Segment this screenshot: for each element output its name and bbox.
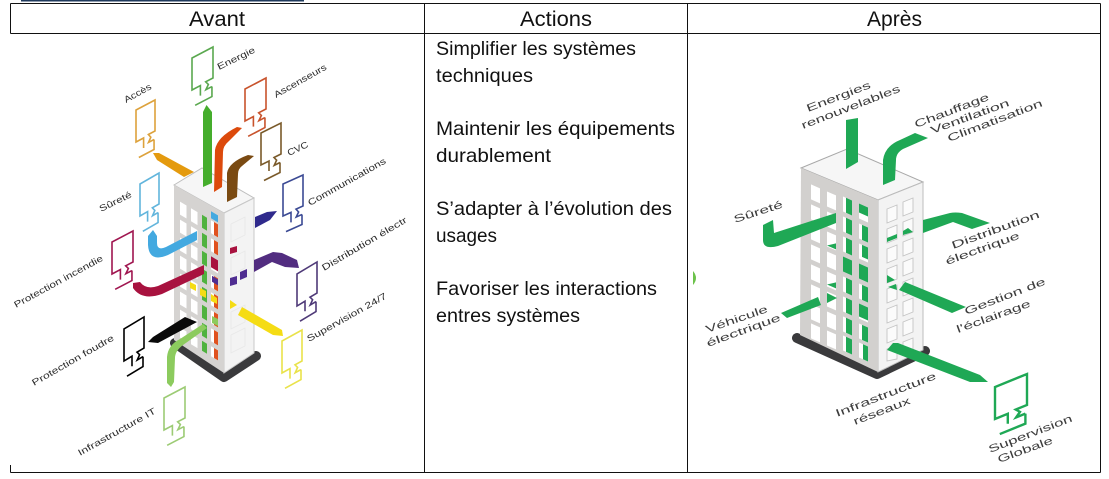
label: Chauffage Ventilation Climatisation <box>913 91 1045 145</box>
label: Distribution électrique: Distribution électr <box>320 215 409 273</box>
action: s'adapter: S’adapter à l’évolution des <box>436 198 672 220</box>
building before <box>174 168 256 377</box>
arrow: distribution <box>254 252 299 272</box>
heading: Avant: Avant <box>189 8 245 31</box>
label: Gestion de l'éclairage: l'éclairage <box>955 298 1033 336</box>
green half-circle mark <box>693 271 696 285</box>
icon: accès <box>136 100 155 159</box>
arrow: protection incendie <box>133 265 204 296</box>
label: Gestion de l'éclairage <box>955 276 1048 336</box>
label: Distribution électrique: Distribution <box>950 209 1042 252</box>
arrow: énergie <box>203 105 212 187</box>
arrow: accès <box>153 153 194 177</box>
icon: communications <box>283 175 303 233</box>
label: Infrastructure IT: Infrastructure IT <box>76 405 158 458</box>
label: Supervision Globale: Supervision <box>987 413 1074 456</box>
building after <box>797 149 925 374</box>
action: simplifier: Simplifier les systèmes <box>436 38 636 60</box>
action: maintenir: Maintenir les équipements <box>436 118 675 140</box>
arrow: infrastructure réseaux <box>887 343 988 382</box>
panel: après diagram <box>693 79 1074 466</box>
label: Energies renouvelables: renouvelables <box>800 83 902 132</box>
label: Sûreté: Sûreté <box>97 189 133 214</box>
label: Distribution électrique: électrique <box>944 230 1022 268</box>
icon: supervision globale <box>995 374 1027 436</box>
label: Ascenseurs: Ascenseurs <box>272 62 329 100</box>
label: Gestion de l'éclairage: Gestion de <box>963 276 1048 318</box>
action: s'adapter: usages <box>436 225 497 247</box>
panel: avant diagram <box>12 45 409 458</box>
action: favoriser <box>436 278 657 327</box>
label: Infrastructure réseaux: Infrastructure <box>834 370 938 420</box>
arrow: véhicule électrique <box>781 293 837 318</box>
label: Energies renouvelables <box>800 79 902 132</box>
label: Véhicule électrique: Véhicule <box>704 303 770 336</box>
panel: actions text <box>436 38 675 327</box>
label: Supervision Globale <box>987 413 1074 466</box>
icon: protection incendie <box>112 231 133 291</box>
label: Protection foudre: Protection foudre <box>30 333 116 388</box>
arrow: énergies renouvelables <box>846 118 858 169</box>
label: Infrastructure réseaux: réseaux <box>852 395 913 428</box>
label: Chauffage Ventilation Climatisation: Ventilation <box>929 97 1011 137</box>
action: simplifier: techniques <box>436 65 533 87</box>
arrow: distribution électrique <box>923 212 990 233</box>
label: Chauffage Ventilation Climatisation: Climatisation <box>946 97 1045 145</box>
label: Chauffage Ventilation Climatisation: Chauffage <box>913 91 991 131</box>
arrow: chauffage ventilation climatisation <box>883 133 928 185</box>
icon: protection foudre <box>124 317 144 378</box>
icon: infrastructure IT <box>164 387 185 447</box>
arrow: communications <box>255 211 277 228</box>
heading: Actions: Actions <box>520 8 592 31</box>
label: Energies renouvelables: Energies <box>805 79 873 115</box>
arrow: sûreté <box>763 213 836 247</box>
icon: supervision <box>282 330 302 390</box>
arrow: sûreté <box>148 230 197 257</box>
action: simplifier <box>436 38 636 87</box>
label: Supervision 24/7: Supervision 24/7 <box>305 291 388 344</box>
icon: distribution <box>297 262 317 323</box>
label: Accès: Accès <box>122 81 154 105</box>
label: Protection incendie: Protection incendie <box>12 253 105 310</box>
icon: sûreté <box>140 173 159 233</box>
arrow: gestion de l'éclairage <box>899 282 966 313</box>
action: favoriser: Favoriser les interactions <box>436 278 657 300</box>
icon: cvc <box>261 123 281 182</box>
label: Distribution électrique <box>944 209 1042 268</box>
action: maintenir <box>436 118 675 167</box>
action: maintenir: durablement <box>436 145 552 167</box>
icon: ascenseurs <box>245 78 266 138</box>
action: favoriser: entres systèmes <box>436 305 580 327</box>
label: CVC: CVC <box>286 139 310 158</box>
label: Énergie: Energie <box>215 45 257 72</box>
label: Communications: Communications <box>306 156 388 208</box>
arrow: infrastructure IT <box>167 324 207 387</box>
heading: Après: Après <box>867 8 922 31</box>
arrow: protection foudre <box>148 317 197 343</box>
action: s'adapter <box>436 198 672 247</box>
label: Infrastructure réseaux <box>834 370 938 428</box>
label: Véhicule électrique: électrique <box>705 312 783 350</box>
icon: énergie <box>192 47 213 107</box>
arrow: ascenseurs <box>214 127 242 192</box>
arrow: supervision <box>238 307 283 336</box>
arrow: cvc <box>227 155 254 202</box>
label: Véhicule électrique <box>704 303 783 350</box>
label: Supervision Globale: Globale <box>996 435 1055 466</box>
label: Sûreté: Sûreté <box>732 199 785 226</box>
